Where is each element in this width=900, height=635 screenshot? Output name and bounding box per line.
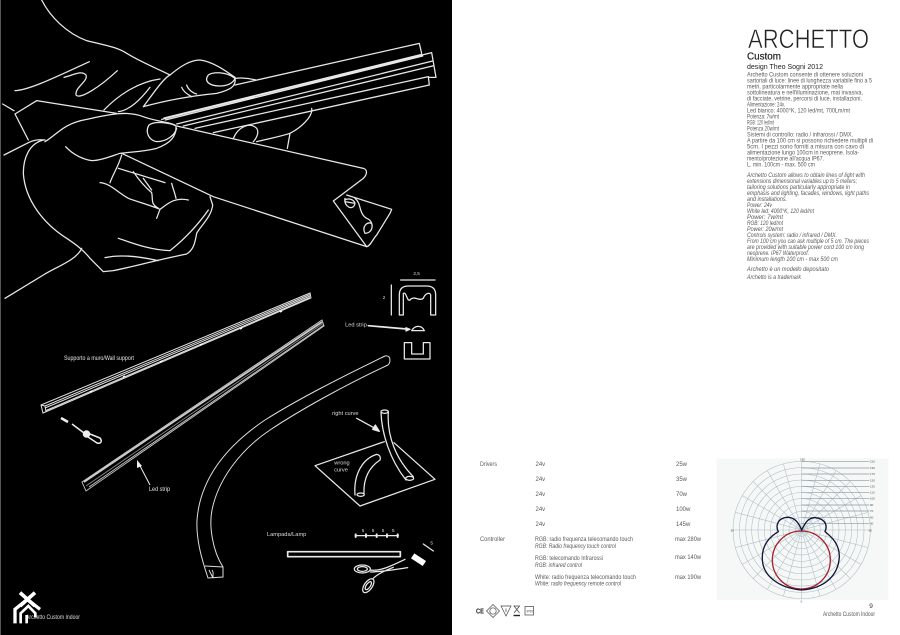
text block: italian description: Alimentazione: 24v. bbox=[747, 102, 785, 108]
illustration: section dimensions: 2 bbox=[383, 295, 386, 300]
table: controller: RGB: infrared control bbox=[535, 563, 583, 569]
table: drivers bbox=[480, 462, 691, 528]
panel: black illustration page bbox=[0, 0, 452, 635]
text block: english description: From 100 cm you can ask multiple of 5 cm. The pieces bbox=[747, 239, 869, 245]
table: drivers: 100w bbox=[676, 507, 691, 513]
table: drivers: 24v bbox=[536, 462, 545, 468]
title: ARCHETTO bbox=[748, 24, 869, 54]
text block: italian description: sottolineatura e nell'illuminazione, mai invasiva, bbox=[747, 90, 863, 96]
chart: polar light distribution: 130 bbox=[870, 484, 875, 488]
table: drivers: 70w bbox=[676, 492, 688, 498]
table: drivers: 24v bbox=[536, 477, 545, 483]
table: controller: RGB: radio frequenza telecomando touch bbox=[535, 537, 633, 543]
footer text: right page: Archetto Custom Indoor bbox=[823, 612, 875, 618]
illustration: led strip rail bbox=[82, 320, 324, 491]
icon: screw and plug bbox=[61, 418, 101, 443]
label: wall support: Supporto a muro/Wall support bbox=[64, 356, 134, 362]
illustration: section dimensions: 2,5 bbox=[413, 271, 420, 276]
text block: english description: White led: 4000°K, 120 led/mt bbox=[747, 209, 814, 215]
text block: english description: tailoring solutions particularly appropriate in bbox=[747, 185, 851, 191]
text block: italian description: Led bianco: 4000°K, 120 led/mt, 700Lm/mt bbox=[747, 108, 850, 114]
chart: polar light distribution: 210 bbox=[870, 460, 875, 464]
chart: polar light distribution bbox=[717, 458, 888, 604]
chart: polar light distribution: 90 bbox=[870, 503, 874, 507]
text block: english description: Power: 20w/mt bbox=[747, 227, 783, 233]
table: controller: Controller bbox=[480, 537, 505, 543]
text block: english description: Power: 7w/mt bbox=[747, 215, 783, 221]
table: controller: RGB: telecomando Infrarossi bbox=[535, 556, 603, 562]
text block: trademark note: Archetto is a trademark bbox=[746, 275, 802, 281]
chart: polar light distribution: 180 bbox=[800, 458, 805, 462]
table: drivers: 24v bbox=[536, 522, 545, 528]
text block: english description: Controls system: radio / infrared / DMX. bbox=[747, 233, 837, 239]
illustration: lamp cut to measure with scissors: 5 bbox=[382, 528, 385, 533]
text block: english description: neoprene. IP67 Waterproof. bbox=[747, 251, 809, 257]
illustration: right and wrong curve bbox=[315, 410, 435, 506]
chart: polar light distribution: 90 bbox=[869, 528, 872, 532]
table: controller: max 190w bbox=[675, 575, 702, 581]
illustration: lamp cut to measure with scissors: 5 bbox=[430, 540, 433, 545]
text block: italian description: Potenza: 7w/mt bbox=[747, 114, 779, 120]
table: drivers: 24v bbox=[536, 492, 545, 498]
illustration: section dimensions bbox=[345, 271, 436, 359]
table: drivers: Drivers bbox=[480, 462, 497, 468]
text block: english description: Minimum length 100 cm - max 500 cm bbox=[747, 257, 838, 263]
footer text: left page: Archetto Custom Indoor bbox=[26, 615, 80, 621]
illustration: right and wrong curve: curve bbox=[334, 467, 348, 473]
chart: polar light distribution: 30 bbox=[870, 521, 874, 525]
curve: red circular distribution bbox=[772, 531, 830, 589]
chart: polar light distribution: 50 bbox=[870, 515, 874, 519]
table: controller: max 140w bbox=[675, 555, 702, 561]
illustration: section dimensions: Led strip bbox=[345, 323, 367, 329]
subtitle: Custom bbox=[747, 52, 781, 62]
illustration: curved profile bbox=[197, 356, 390, 578]
table: controller: White: radio frequency remote control bbox=[535, 582, 622, 588]
illustration: lamp cut to measure with scissors: 5 bbox=[362, 528, 365, 533]
text block: english description: extensions dimensional variables up to 5 meters; bbox=[747, 179, 857, 185]
text block: italian description: RGB: 120 led/mt bbox=[747, 120, 774, 126]
illustration: lamp cut to measure with scissors: 5 bbox=[392, 528, 395, 533]
text block: trademark note bbox=[746, 267, 830, 281]
chart: polar light distribution: 110 bbox=[870, 491, 875, 495]
text block: english description: and installations. bbox=[747, 197, 787, 203]
table: drivers: 145w bbox=[676, 522, 691, 528]
logo: house watermark bbox=[15, 593, 40, 623]
text block: italian description: Sistemi di controllo: radio / infrarossi / DMX. bbox=[747, 132, 853, 138]
chart: polar light distribution: 0 bbox=[801, 600, 803, 604]
chart: polar light distribution: 70 bbox=[870, 509, 874, 513]
text block: trademark note: Archetto è un modello depositato bbox=[746, 267, 830, 273]
illustration: right and wrong curve: right curve bbox=[332, 411, 359, 417]
text block: english description: are provided with suitable power cord 100 cm long bbox=[747, 245, 865, 251]
designer credit: design Theo Sogni 2012 bbox=[747, 62, 823, 71]
illustration: lamp cut to measure with scissors: 5 bbox=[372, 528, 375, 533]
table: drivers: 35w bbox=[676, 477, 688, 483]
text block: english description bbox=[746, 173, 869, 263]
text block: english description: Power: 24v bbox=[747, 203, 773, 209]
chart: polar light distribution: 150 bbox=[870, 478, 875, 482]
table: controller bbox=[480, 537, 702, 588]
text block: italian description: A partire da 100 cm si possono richiedere multipli di bbox=[747, 138, 873, 144]
icons: certification marks: IP67 bbox=[526, 610, 534, 614]
text block: italian description: 5cm. I pezzi sono forniti a misura con cavo di bbox=[747, 144, 864, 150]
icons: certification marks: CE bbox=[476, 606, 484, 616]
text block: italian description bbox=[747, 72, 873, 168]
chart: polar light distribution: 90 bbox=[731, 528, 734, 532]
text block: english description: RGB: 120 led/mt bbox=[747, 221, 783, 227]
table: controller: RGB: Radio frequency touch control bbox=[535, 544, 617, 550]
chart: polar light distribution: 170 bbox=[870, 472, 875, 476]
icons: certification marks bbox=[476, 604, 534, 618]
text block: italian description: Archetto Custom consente di ottenere soluzioni bbox=[747, 72, 863, 78]
illustration: lamp cut to measure with scissors: Lampada/Lamp bbox=[267, 532, 306, 538]
text block: italian description: L. min. 100cm - max. 500 cm bbox=[747, 162, 815, 168]
table: drivers: 25w bbox=[676, 462, 688, 468]
chart: polar light distribution: 100 bbox=[870, 497, 875, 501]
curve: black distribution bbox=[762, 517, 839, 590]
table: drivers: 24v bbox=[536, 507, 545, 513]
text block: italian description: metri, particolarmente appropriate nella bbox=[747, 84, 844, 90]
illustration: lamp cut to measure with scissors bbox=[267, 528, 433, 595]
text block: italian description: sartoriali di luce: linee di lunghezza variabile fino a 5 bbox=[747, 78, 873, 84]
text block: italian description: alimentazione lungo 100cm in neoprene. Isola- bbox=[747, 150, 859, 156]
table: controller: White: radio frequenza telecomando touch bbox=[535, 575, 636, 581]
label and arrow: led strip bbox=[137, 460, 171, 493]
illustration: wall support rail bbox=[41, 293, 311, 413]
text block: italian description: di facciate, vetrine, percorsi di luce, installazioni. bbox=[747, 96, 862, 102]
illustration: right and wrong curve: wrong bbox=[333, 461, 350, 467]
text block: italian description: mento/protezione all'acqua IP67. bbox=[747, 156, 824, 162]
chart: polar light distribution: 190 bbox=[870, 466, 875, 470]
label and arrow: led strip: Led strip bbox=[149, 487, 171, 493]
text block: italian description: Potenza 20w/mt bbox=[747, 126, 779, 132]
table: controller: max 280w bbox=[675, 537, 702, 543]
text block: english description: Archetto Custom allows to obtain lines of light with bbox=[746, 173, 866, 179]
text block: english description: emphasis and lighting, facades, windows, light paths bbox=[747, 191, 869, 197]
page number: 9 bbox=[869, 603, 873, 610]
illustration: hands holding profile bbox=[3, 0, 436, 298]
